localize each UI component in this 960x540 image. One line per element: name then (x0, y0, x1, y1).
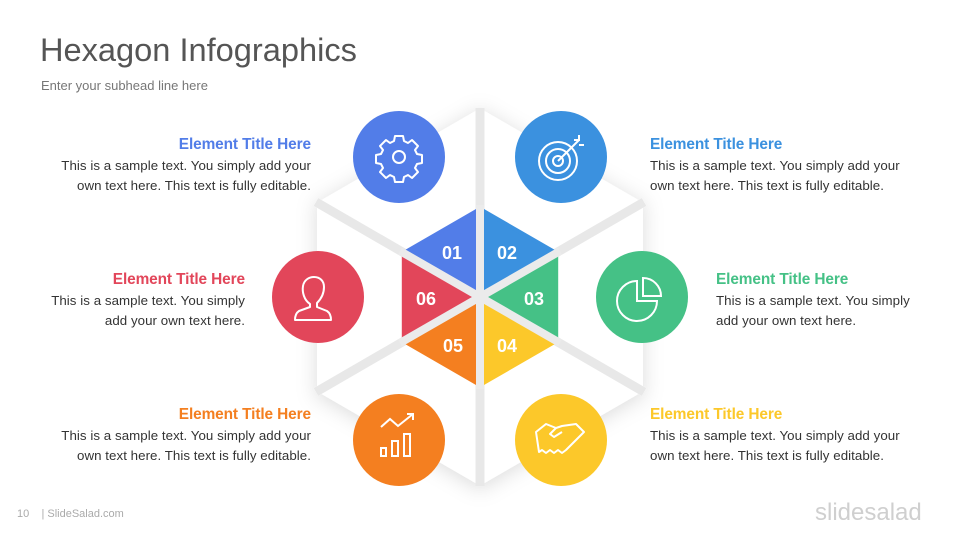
block 02 (650, 136, 900, 193)
block 04: This is a sample text. You simply add your (650, 428, 900, 443)
numbers: 02 (497, 243, 517, 263)
block 06: Element Title Here (113, 271, 245, 288)
block 03: add your own text here. (716, 313, 856, 328)
block 01 (61, 136, 311, 193)
block 05: Element Title Here (179, 406, 311, 423)
block 01: Element Title Here (179, 136, 311, 153)
numbers (416, 243, 544, 356)
block 03: Element Title Here (716, 271, 848, 288)
block 05 (61, 406, 311, 463)
block 05: own text here. This text is fully editable. (77, 448, 311, 463)
icon: pie chart (596, 251, 688, 343)
icon: target (515, 111, 607, 203)
block 02: This is a sample text. You simply add your (650, 158, 900, 173)
numbers: 01 (442, 243, 462, 263)
icon: user (272, 251, 364, 343)
block 02: own text here. This text is fully editable. (650, 178, 884, 193)
inner colored triangles (404, 209, 556, 385)
block 01: own text here. This text is fully editable. (77, 178, 311, 193)
subhead: Enter your subhead line here (41, 78, 208, 93)
block 06 (51, 271, 245, 328)
numbers: 03 (524, 289, 544, 309)
icon: growth chart (353, 394, 445, 486)
footer: 10 | SlideSalad.com (17, 508, 124, 520)
block 06: This is a sample text. You simply (51, 293, 245, 308)
numbers: 05 (443, 336, 463, 356)
numbers: 06 (416, 289, 436, 309)
block 04: Element Title Here (650, 406, 782, 423)
icon: handshake (515, 394, 607, 486)
block 03 (716, 271, 910, 328)
block 05: This is a sample text. You simply add your (61, 428, 311, 443)
block 04: own text here. This text is fully editable. (650, 448, 884, 463)
icon: gear (353, 111, 445, 203)
title: Hexagon Infographics (40, 31, 357, 68)
numbers: 04 (497, 336, 517, 356)
block 06: add your own text here. (105, 313, 245, 328)
block 03: This is a sample text. You simply (716, 293, 910, 308)
block 01: This is a sample text. You simply add your (61, 158, 311, 173)
outer hexagon panels (316, 108, 644, 486)
logo: slidesalad (815, 499, 922, 526)
block 04 (650, 406, 900, 463)
block 02: Element Title Here (650, 136, 782, 153)
